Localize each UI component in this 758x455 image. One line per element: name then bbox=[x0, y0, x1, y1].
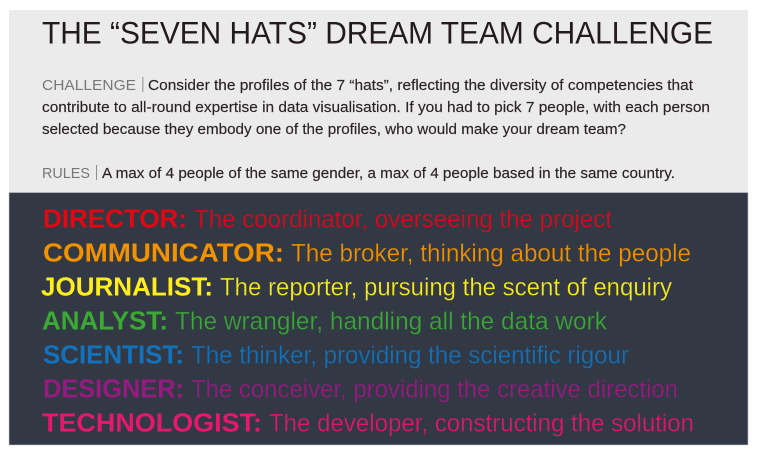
panel: challenge intro bbox=[9, 10, 748, 193]
hat: analyst: ANALYST: bbox=[42, 308, 168, 336]
text block: challenge: Consider the profiles of the 7 “hats”, reflecting the diversity of competencies that bbox=[148, 78, 693, 94]
text block: challenge bbox=[42, 77, 710, 138]
hat: analyst: The wrangler, handling all the data work bbox=[175, 308, 607, 336]
hat: communicator: The broker, thinking about the people bbox=[291, 240, 691, 268]
text block: rules: A max of 4 people of the same gender, a max of 4 people based in the same country. bbox=[102, 166, 675, 182]
hat: designer: The conceiver, providing the creative direction bbox=[191, 376, 678, 404]
hat: communicator bbox=[43, 240, 691, 268]
text block: challenge: selected because they embody one of the profiles, who would make your dream team? bbox=[42, 122, 626, 138]
hat: director: The coordinator, overseeing the project bbox=[194, 206, 612, 234]
text block: challenge: contribute to all-round expertise in data visualisation. If you had to pick 7 people, with each person bbox=[42, 100, 710, 116]
hat: journalist bbox=[41, 274, 672, 302]
hat: technologist: The developer, constructing the solution bbox=[269, 410, 694, 438]
panel: seven hats list bbox=[9, 192, 748, 445]
hat: director: DIRECTOR: bbox=[43, 206, 187, 234]
text block: challenge: CHALLENGE bbox=[42, 77, 136, 94]
text block: rules: RULES bbox=[42, 165, 90, 182]
hat: journalist: JOURNALIST: bbox=[41, 274, 213, 302]
title: THE “SEVEN HATS” DREAM TEAM CHALLENGE bbox=[42, 14, 713, 50]
hat: journalist: The reporter, pursuing the scent of enquiry bbox=[220, 274, 672, 302]
hat: communicator: COMMUNICATOR: bbox=[43, 240, 284, 268]
hat: technologist bbox=[42, 410, 694, 438]
hat: technologist: TECHNOLOGIST: bbox=[42, 410, 262, 438]
hat: scientist: The thinker, providing the scientific rigour bbox=[191, 342, 629, 370]
hat: scientist: SCIENTIST: bbox=[43, 342, 184, 370]
hat: designer: DESIGNER: bbox=[43, 376, 184, 404]
